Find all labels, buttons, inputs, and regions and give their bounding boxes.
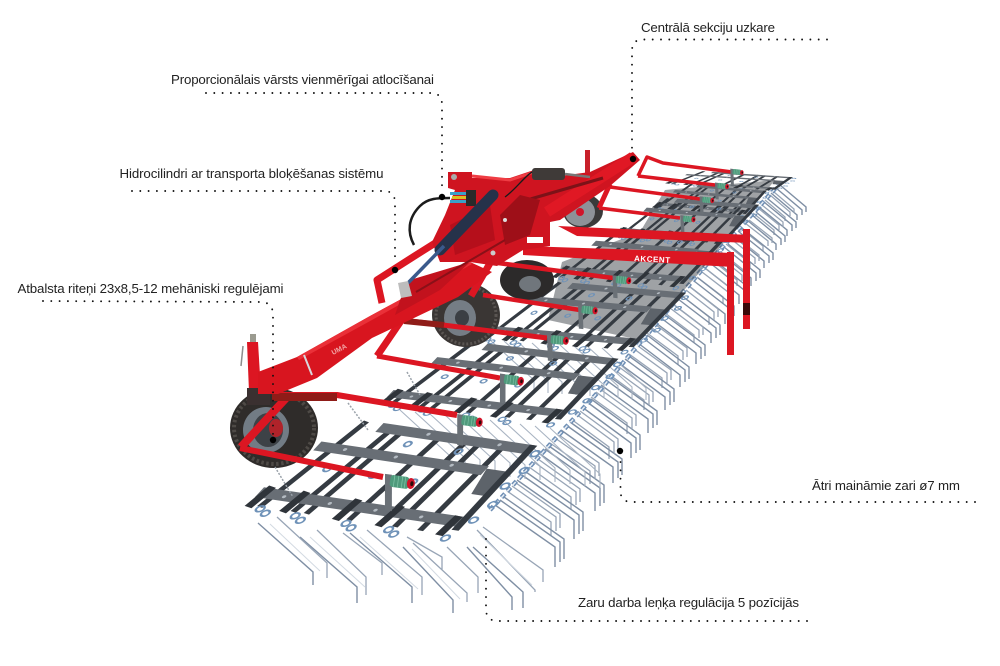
central frame xyxy=(395,150,640,315)
callout: Proporcionālais vārsts xyxy=(171,72,445,200)
callout: Ātri maināmie zari xyxy=(617,448,975,502)
callout: Ātri maināmie zari: Ātri maināmie zari ø7 mm xyxy=(812,478,960,493)
callout: Hidrocilindri: Hidrocilindri ar transporta bloķēšanas sistēmu xyxy=(120,166,384,181)
drawbar: UMA xyxy=(331,343,348,357)
rear section shading xyxy=(548,180,775,340)
callout: Centrālā sekciju uzkare xyxy=(630,20,827,162)
red section arms xyxy=(240,157,732,477)
section: far harrow G xyxy=(664,170,799,192)
wing arm upper xyxy=(558,226,750,329)
lower arms near hitch xyxy=(416,240,505,292)
fold arm left xyxy=(377,240,440,303)
top fold cylinder xyxy=(505,168,590,197)
section: harrow B xyxy=(375,338,629,431)
wing arm lower with brand: AKCENT xyxy=(634,254,670,265)
hitch post xyxy=(241,334,270,405)
section: harrow C xyxy=(472,279,695,357)
callout: Centrālā sekciju uzkare: Centrālā sekciju uzkare xyxy=(641,20,775,35)
section: front harrow A xyxy=(239,415,549,547)
callout: Atbalsta riteņi xyxy=(18,281,284,443)
valve block fittings xyxy=(450,190,476,206)
support wheel centre xyxy=(432,283,500,347)
chains xyxy=(275,372,420,497)
wing arm lower with brand xyxy=(523,246,734,355)
spring tines xyxy=(258,181,806,613)
callout: Hidrocilindri xyxy=(120,166,398,273)
support wheel front xyxy=(230,388,318,468)
spring cartridges xyxy=(380,169,744,514)
callout: Proporcionālais vārsts: Proporcionālais vārsts vienmērīgai atlocīšanai xyxy=(171,72,434,87)
callout: Zaru darba leņķa xyxy=(486,533,807,621)
rear wheel middle xyxy=(500,260,554,300)
section: harrow F xyxy=(651,183,772,218)
transport lock cylinder xyxy=(398,195,493,298)
callout: Atbalsta riteņi: Atbalsta riteņi 23x8,5-12 mehāniski regulējami xyxy=(18,281,284,296)
rear wheel right xyxy=(563,194,603,228)
callout: Zaru darba leņķa: Zaru darba leņķa regulācija 5 pozīcijās xyxy=(578,595,799,610)
section: harrow E xyxy=(610,197,766,248)
drawbar xyxy=(258,262,492,394)
section: harrow D xyxy=(549,227,735,292)
hose xyxy=(410,198,450,245)
